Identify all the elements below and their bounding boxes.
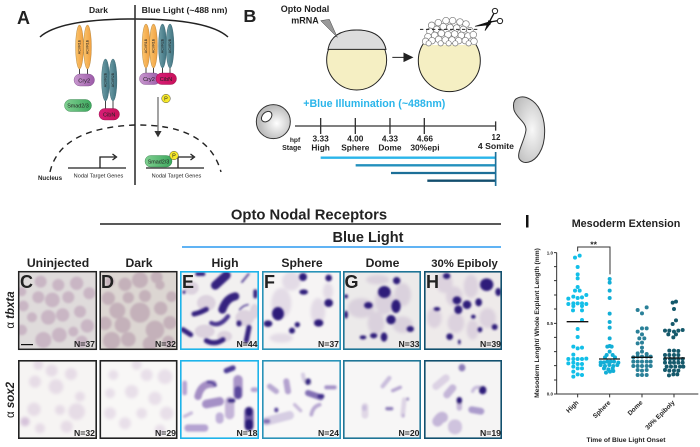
dark side receptors: ACVR2B xyxy=(104,72,108,87)
column labels: 30% Epiboly xyxy=(431,258,498,270)
timeline labels: 4.66 xyxy=(417,133,433,143)
dark side receptors: ACVR1B xyxy=(78,39,82,54)
panel C xyxy=(16,271,97,350)
divider between dark and light xyxy=(134,5,136,185)
scale bar xyxy=(21,344,33,345)
significance stars: ** xyxy=(590,239,598,249)
timeline labels: 4.00 xyxy=(347,133,364,143)
column labels: Sphere xyxy=(281,256,323,270)
column labels: High xyxy=(211,256,239,270)
series: Sphere xyxy=(599,277,620,375)
timeline labels: High xyxy=(311,142,330,152)
timeline labels: 4.33 xyxy=(382,133,398,143)
x tick labels xyxy=(565,399,677,431)
light side receptor complex: ACVR1B xyxy=(152,38,156,53)
panel F sox2 xyxy=(262,360,341,439)
column labels: Uninjected xyxy=(27,256,89,270)
light side receptor complex: CibN xyxy=(160,77,172,83)
y ticks xyxy=(547,250,553,396)
panel G sox2 xyxy=(343,360,421,439)
light side receptor complex: Cry2 xyxy=(143,77,155,83)
phospho P xyxy=(162,94,170,103)
Smad2/3 dark: Smad2/3 xyxy=(67,104,89,110)
light side receptor complex: ACVR1B xyxy=(144,38,148,53)
count: N=39 xyxy=(480,339,501,349)
label F: F xyxy=(264,272,275,292)
column labels xyxy=(27,256,498,270)
count: N=32 xyxy=(74,428,95,438)
panel I: scatter plot xyxy=(526,215,698,444)
median lines xyxy=(567,322,685,359)
x tick labels: 30% Epiboly xyxy=(644,399,677,431)
heading: Blue Light: Blue Light xyxy=(333,230,404,246)
count: N=44 xyxy=(236,339,258,349)
label H: H xyxy=(426,272,439,292)
dark side receptors: ACVR2B xyxy=(111,72,115,87)
nuclear envelope xyxy=(50,125,221,172)
timeline labels: hpf xyxy=(290,137,301,144)
column labels: Dome xyxy=(366,256,400,270)
count: N=20 xyxy=(398,428,420,438)
Cry2 dark: Cry2 xyxy=(78,78,90,84)
arrow into nucleus xyxy=(155,97,161,136)
y ticks: 0.5 xyxy=(547,321,553,326)
count: N=37 xyxy=(318,339,339,349)
label E: E xyxy=(182,272,194,292)
dark gene xyxy=(68,154,126,168)
gene labels: Nodal Target Genes xyxy=(74,174,124,180)
Smad2/3 dark xyxy=(64,100,92,112)
blue bracket xyxy=(182,246,501,248)
count: N=18 xyxy=(236,428,258,438)
panel H xyxy=(424,271,502,350)
x axis title: Time of Blue Light Onset xyxy=(586,437,666,444)
Cry2 dark xyxy=(74,74,94,86)
blue illumination label: +Blue Illumination (~488nm) xyxy=(303,98,446,110)
dark side receptors: ACVR1B xyxy=(86,39,90,54)
series: 30% Epiboly xyxy=(663,300,685,377)
light gene xyxy=(146,154,204,168)
count: N=19 xyxy=(480,428,501,438)
axes xyxy=(554,253,698,397)
timeline labels: 12 xyxy=(492,133,501,142)
label D: D xyxy=(101,272,114,292)
injected embryo xyxy=(321,19,387,90)
y ticks: 0.0 xyxy=(547,392,553,396)
heading: Opto Nodal Receptors: Opto Nodal Receptors xyxy=(231,208,387,224)
explanted embryo xyxy=(418,17,480,92)
gene label right: Nodal Target Genes xyxy=(152,174,202,180)
heading: Dark: Dark xyxy=(89,5,108,15)
panel E sox2 xyxy=(180,360,259,439)
label A: A xyxy=(17,8,30,28)
plot title: Mesoderm Extension xyxy=(572,218,680,230)
x tick labels: Sphere xyxy=(592,399,613,420)
timeline labels: Sphere xyxy=(341,142,370,152)
light side receptor complex xyxy=(140,24,176,84)
mRNA label: Opto Nodal xyxy=(281,4,329,14)
arrow xyxy=(392,53,412,61)
Smad2/3 nuclear: Smad2/3 xyxy=(148,160,169,166)
y ticks: 1.0 xyxy=(547,250,553,256)
panel H sox2 xyxy=(424,360,502,439)
panel D xyxy=(98,271,178,351)
x tick labels: High xyxy=(565,399,580,415)
y axis title: Mesoderm Lenght/ Whole Explant Length (mm) xyxy=(534,248,541,398)
phospho P: P xyxy=(164,97,168,103)
panel G xyxy=(343,271,421,350)
panel F xyxy=(262,271,341,350)
timeline labels xyxy=(282,133,514,152)
panel E xyxy=(180,271,259,350)
panel D sox2 xyxy=(100,360,178,439)
series: High xyxy=(566,254,588,379)
mRNA label line two: mRNA xyxy=(291,15,319,25)
dark side receptors xyxy=(76,25,117,110)
significance bracket xyxy=(578,247,610,274)
light side receptor complex: ACVR2B xyxy=(168,38,172,53)
panel B: experiment schematic xyxy=(243,4,514,186)
illumination bars xyxy=(321,152,496,186)
column labels: Dark xyxy=(125,256,153,270)
label G: G xyxy=(344,272,359,292)
timeline labels: Stage xyxy=(282,145,301,152)
CibN dark xyxy=(99,108,120,120)
Smad2/3 nuclear: P xyxy=(172,154,176,160)
light side receptor complex: ACVR2B xyxy=(160,38,164,53)
Smad2/3 nuclear xyxy=(145,151,178,167)
count: N=24 xyxy=(318,428,339,438)
label I xyxy=(526,215,528,228)
CibN dark: CibN xyxy=(103,112,115,118)
series: Dome xyxy=(631,305,653,377)
count: N=33 xyxy=(398,339,420,349)
timeline labels: 30%epi xyxy=(410,142,440,152)
Nucleus label: Nucleus xyxy=(38,175,63,182)
row label tbxta: α tbxta xyxy=(5,291,17,329)
panel C sox2 xyxy=(18,360,97,439)
timeline labels: 3.33 xyxy=(313,133,329,143)
label C: C xyxy=(20,272,33,292)
icon: scissors xyxy=(475,8,503,31)
label B: B xyxy=(243,6,256,26)
explant xyxy=(514,97,545,162)
count: N=29 xyxy=(155,428,176,438)
heading: Blue Light: Blue Light (~488 nm) xyxy=(142,5,227,15)
timeline labels: Dome xyxy=(378,142,402,152)
x tick labels: Dome xyxy=(627,399,645,417)
cell membrane xyxy=(40,19,228,37)
timeline labels: 4 Somite xyxy=(478,141,514,151)
timeline xyxy=(295,118,496,134)
row label sox2: α sox2 xyxy=(5,381,17,418)
count: N=32 xyxy=(155,339,176,349)
panel A: receptor signalling diagram xyxy=(17,5,228,185)
bracket xyxy=(100,223,501,225)
icon: fertilised egg xyxy=(256,105,290,139)
count: N=37 xyxy=(74,339,95,349)
